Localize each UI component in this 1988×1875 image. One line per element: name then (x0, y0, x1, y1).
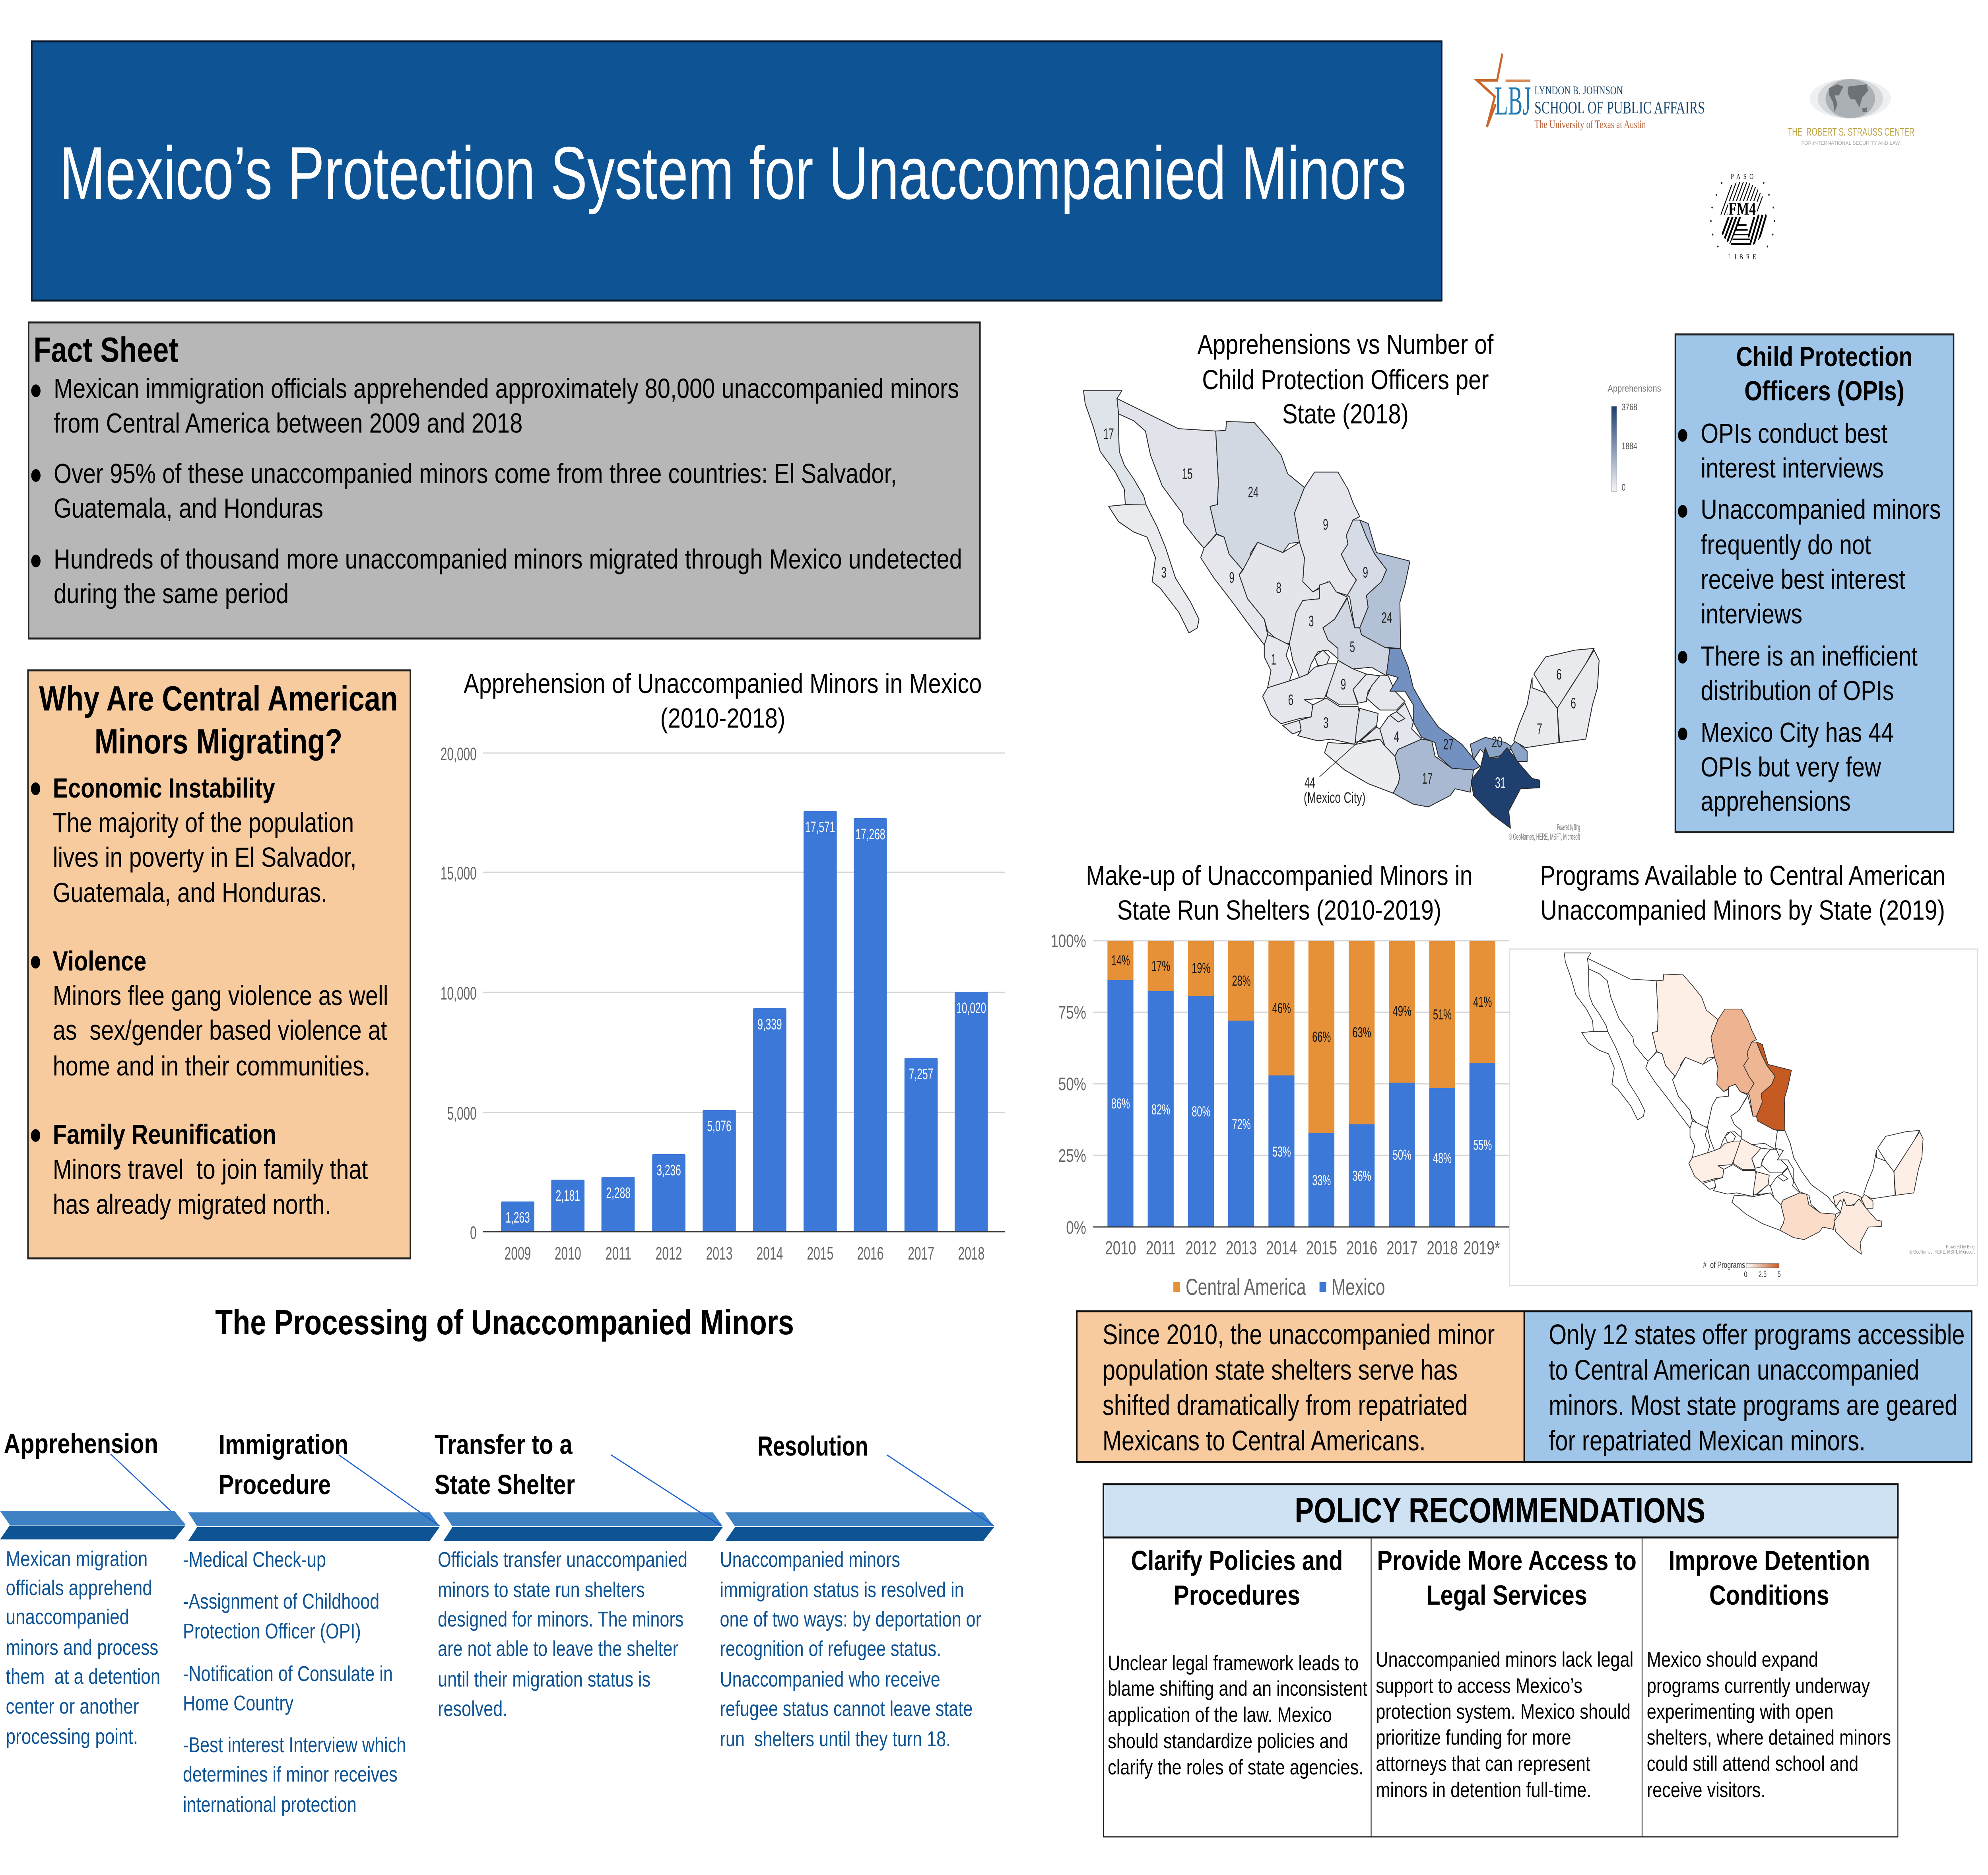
step 3 text: minors to state run shelters (438, 1578, 645, 1602)
x axis labels: 2014 (1266, 1237, 1297, 1258)
map state labels: 6 (1288, 691, 1293, 708)
panel: programs map (1509, 949, 1978, 1285)
why text: has already migrated north. (53, 1189, 331, 1220)
chart title (464, 668, 982, 734)
x axis labels (1105, 1237, 1500, 1258)
bar value labels: 2,288 (606, 1184, 631, 1201)
step 1 text (6, 1547, 160, 1749)
central america segments (1107, 941, 1495, 1133)
why text: Family Reunification (53, 1119, 276, 1150)
central america percentages (1111, 953, 1492, 1045)
heading: why migrating: Why Are Central American (39, 679, 398, 718)
step headings: Resolution (757, 1431, 868, 1462)
mexico percentages: 72% (1232, 1116, 1251, 1132)
map state labels: 6 (1571, 695, 1576, 712)
logo: LBJ School of Public Affairs: LBJ (1495, 78, 1531, 124)
recommendation: detention conditions: receive visitors. (1647, 1778, 1765, 1802)
map attribution (1910, 1244, 1975, 1255)
recommendation: detention conditions: Conditions (1709, 1580, 1829, 1611)
opi text: Unaccompanied minors (1701, 494, 1941, 525)
logo: Robert S. Strauss Center: FOR INTERNATIONAL SECURITY AND LAW (1802, 141, 1900, 146)
recommendation: clarify policies: clarify the roles of state agencies. (1108, 1756, 1363, 1779)
central america percentages: 66% (1312, 1029, 1331, 1045)
recommendation: detention conditions: experimenting with open (1647, 1700, 1834, 1724)
why bullets (31, 782, 40, 1142)
map state labels: 6 (1556, 666, 1562, 683)
opi text: receive best interest (1701, 564, 1905, 595)
recommendation: legal services: protection system. Mexico should (1376, 1700, 1631, 1724)
map legend: apprehensions: 1884 (1622, 441, 1637, 452)
x axis labels: 2009 (505, 1244, 531, 1264)
y axis labels: 10,000 (441, 984, 477, 1004)
y axis labels: 0% (1066, 1218, 1086, 1238)
step 2 text (183, 1548, 406, 1817)
recommendation: legal services: attorneys that can represent (1376, 1752, 1590, 1776)
panel: fact sheet (29, 322, 980, 639)
map state labels: 3 (1323, 714, 1328, 731)
mexico percentages: 55% (1473, 1137, 1492, 1153)
why text: lives in poverty in El Salvador, (53, 842, 357, 873)
process timeline (0, 1428, 994, 1817)
why text (53, 773, 388, 1220)
mexico percentages: 80% (1192, 1104, 1210, 1120)
chart title (1086, 860, 1473, 926)
mexico percentages (1111, 1096, 1492, 1188)
x axis labels: 2013 (706, 1244, 732, 1264)
x axis labels: 2019* (1464, 1237, 1500, 1258)
chart legend (1173, 1274, 1385, 1300)
heading: apprehensions vs number of child protection officers: State (2018) (1282, 398, 1409, 429)
y axis labels: 50% (1058, 1074, 1086, 1094)
heading: apprehensions vs number of child protection officers: Apprehensions vs Number of (1198, 329, 1493, 360)
recommendation: clarify policies: Unclear legal framework leads to (1108, 1652, 1359, 1675)
step 3 text: resolved. (438, 1697, 507, 1721)
opi text: apprehensions (1701, 786, 1851, 817)
logo: Robert S. Strauss Center (1788, 79, 1914, 146)
heading: fact sheet: Fact Sheet (33, 330, 178, 370)
bar value labels: 7,257 (909, 1066, 933, 1082)
map state labels: 3 (1161, 564, 1167, 581)
mexico segments (1107, 980, 1495, 1227)
opi bullets (1678, 429, 1687, 740)
title banner: Mexico’s Protection System for Unaccompanied Minors (60, 131, 1406, 215)
choropleth map: programs per state (1564, 953, 1923, 1254)
y axis labels: 100% (1050, 931, 1086, 951)
why text: Guatemala, and Honduras. (53, 877, 327, 908)
callout: shelter population shift: Mexicans to Central Americans. (1103, 1425, 1426, 1456)
opi text: Mexico City has 44 (1701, 717, 1894, 748)
map state labels: 7 (1537, 720, 1542, 737)
bar value labels: 1,263 (505, 1209, 530, 1226)
fact sheet text: Mexican immigration officials apprehended approximately 80,000 unaccompanied minors (54, 373, 959, 404)
step 2 text: Home Country (183, 1692, 294, 1715)
step 2 text: international protection (183, 1793, 357, 1817)
heading: why migrating: Minors Migrating? (95, 722, 342, 761)
map state labels: 9 (1341, 676, 1346, 693)
central america percentages: 28% (1232, 973, 1251, 989)
map state labels (1103, 425, 1576, 806)
recommendation: clarify policies: should standardize policies and (1108, 1729, 1348, 1753)
step 1 text: center or another (6, 1695, 139, 1718)
mexico percentages: 36% (1353, 1168, 1371, 1184)
x axis labels (505, 1244, 984, 1264)
central america percentages: 14% (1111, 953, 1130, 969)
callout: state programs: Only 12 states offer programs accessible (1549, 1318, 1965, 1350)
map attribution: © GeoNames, HERE, MSFT, Microsoft (1509, 833, 1580, 842)
callout: state programs: to Central American unaccompanied (1549, 1354, 1919, 1386)
step 2 text: -Medical Check-up (183, 1548, 326, 1572)
step 1 text: Mexican migration (6, 1547, 148, 1571)
heading: why migrating (39, 679, 398, 761)
central america percentages: 19% (1192, 960, 1210, 976)
map legend: apprehensions (1607, 383, 1661, 493)
y axis labels (1050, 931, 1086, 1238)
step headings: State Shelter (435, 1469, 575, 1500)
opi text: interviews (1701, 598, 1802, 629)
step 1 text: processing point. (6, 1725, 138, 1749)
step headings: Transfer to a (435, 1429, 573, 1460)
why text: Minors flee gang violence as well (53, 980, 388, 1011)
step 2 text: -Best interest Interview which (183, 1733, 406, 1757)
logo: Paso Libre FM4: LIBRE (1728, 252, 1756, 261)
step 4 text: recognition of refugee status. (720, 1637, 941, 1661)
step 3 text: are not able to leave the shelter (438, 1637, 678, 1661)
callout: state programs: for repatriated Mexican minors. (1549, 1425, 1866, 1456)
logo: Paso Libre FM4 (1710, 172, 1775, 261)
chart legend: Mexico (1332, 1274, 1385, 1300)
panel: child protection officers (1675, 334, 1953, 832)
x axis labels: 2015 (1306, 1237, 1337, 1258)
callout: state programs: minors. Most state programs are geared (1549, 1389, 1957, 1421)
map state labels: 15 (1182, 465, 1193, 482)
heading: programs available by state: Unaccompanied Minors by State (2019) (1540, 895, 1945, 926)
step 3 text: until their migration status is (438, 1668, 650, 1691)
opi heading: Child Protection (1736, 341, 1912, 372)
step 2 text: Protection Officer (OPI) (183, 1620, 361, 1643)
y axis labels: 25% (1058, 1146, 1086, 1166)
map legend: apprehensions: Apprehensions (1607, 383, 1661, 394)
text: Powered by Bing (1557, 823, 1580, 833)
y axis labels: 0 (470, 1223, 477, 1243)
bar value labels: 3,236 (656, 1162, 681, 1178)
step 2 text: -Assignment of Childhood (183, 1590, 379, 1613)
x axis labels: 2018 (1427, 1237, 1458, 1258)
map legend: apprehensions: 0 (1622, 482, 1625, 493)
programs legend: 0 (1744, 1270, 1747, 1279)
why text: Violence (53, 945, 146, 976)
bar value labels (505, 819, 986, 1226)
step 3 text (438, 1548, 687, 1721)
recommendation: legal services (1376, 1545, 1637, 1802)
map state labels: 9 (1323, 516, 1328, 533)
fact sheet text (54, 373, 962, 609)
step 3 text: designed for minors. The minors (438, 1608, 683, 1631)
heading: programs available by state (1540, 860, 1945, 926)
why text: Minors travel to join family that (53, 1154, 368, 1185)
programs legend: 2.5 (1759, 1270, 1767, 1279)
map state labels: 3 (1309, 612, 1314, 629)
recommendation: clarify policies: application of the law. Mexico (1108, 1703, 1332, 1727)
opi text: frequently do not (1701, 529, 1871, 560)
recommendation: detention conditions: programs currently underway (1647, 1674, 1870, 1698)
map state labels: 44 (1305, 774, 1315, 791)
step 1 text: minors and process (6, 1636, 158, 1660)
step headings: Procedure (219, 1469, 331, 1500)
step 4 text: run shelters until they turn 18. (720, 1727, 951, 1751)
map state labels: 31 (1495, 774, 1506, 791)
chart legend: Central America (1186, 1274, 1306, 1300)
callout: shelter population shift: population state shelters serve has (1103, 1354, 1458, 1386)
x axis labels: 2011 (1146, 1237, 1176, 1258)
map state labels: 24 (1248, 483, 1258, 501)
map state labels: 5 (1350, 638, 1355, 655)
chart title: State Run Shelters (2010-2019) (1117, 895, 1441, 926)
chart title: Apprehension of Unaccompanied Minors in Mexico (464, 668, 982, 699)
x axis labels: 2010 (1105, 1237, 1136, 1258)
step 3 text: Officials transfer unaccompanied (438, 1548, 687, 1572)
map state labels: 1 (1271, 651, 1276, 668)
opi heading: Officers (OPIs) (1744, 375, 1905, 406)
x axis labels: 2012 (1186, 1237, 1217, 1258)
map legend: apprehensions: 3768 (1622, 402, 1637, 413)
programs legend (1703, 1261, 1781, 1279)
step 2 text: -Notification of Consulate in (183, 1662, 393, 1686)
why text: as sex/gender based violence at (53, 1015, 387, 1046)
step 2 text: determines if minor receives (183, 1763, 398, 1786)
y axis labels: 5,000 (447, 1104, 477, 1124)
fact sheet text: Hundreds of thousand more unaccompanied minors migrated through Mexico undetected (54, 543, 962, 575)
chart title: (2010-2018) (660, 703, 785, 734)
panel: policy recommendations (1103, 1484, 1898, 1837)
fact sheet text: Guatemala, and Honduras (54, 493, 323, 524)
bar value labels: 17,268 (855, 826, 885, 842)
step 4 text: refugee status cannot leave state (720, 1697, 973, 1721)
logo: LBJ School of Public Affairs (1477, 54, 1705, 131)
fact sheet text: during the same period (54, 578, 289, 609)
callout: state programs (1524, 1311, 1972, 1462)
programs legend: 5 (1778, 1270, 1781, 1279)
logo: LBJ School of Public Affairs: The University of Texas at Austin (1534, 118, 1646, 131)
logo: LBJ School of Public Affairs: SCHOOL OF PUBLIC AFFAIRS (1534, 98, 1705, 117)
leader lines (111, 1454, 994, 1526)
stacked bar chart: make-up of unaccompanied minors in shelters (1050, 860, 1509, 1300)
recommendation: detention conditions: could still attend school and (1647, 1752, 1858, 1776)
x axis labels: 2013 (1226, 1237, 1257, 1258)
fact sheet bullets (31, 384, 41, 567)
x axis labels: 2010 (555, 1244, 581, 1264)
callout: shelter population shift: shifted dramatically from repatriated (1103, 1389, 1468, 1421)
x axis labels: 2016 (1346, 1237, 1377, 1258)
central america percentages: 49% (1393, 1003, 1411, 1019)
x axis labels: 2018 (958, 1244, 984, 1264)
recommendation: clarify policies: blame shifting and an inconsistent (1108, 1677, 1368, 1700)
x axis labels: 2017 (908, 1244, 934, 1264)
recommendation: legal services: support to access Mexico’s (1376, 1674, 1582, 1698)
map state labels: 27 (1443, 736, 1454, 753)
recommendation: legal services: Legal Services (1426, 1580, 1587, 1611)
map attribution: © GeoNames, HERE, MSFT, Microsoft (1910, 1250, 1975, 1255)
callout: shelter population shift (1077, 1311, 1524, 1462)
central america percentages: 51% (1433, 1007, 1452, 1023)
x axis labels: 2016 (857, 1244, 883, 1264)
bar value labels: 9,339 (757, 1016, 782, 1033)
choropleth map: child protection officers per state (1083, 391, 1599, 828)
map state labels: 17 (1103, 425, 1114, 442)
callout: shelter population shift: Since 2010, the unaccompanied minor (1103, 1318, 1495, 1350)
step headings: Apprehension (4, 1428, 158, 1459)
y axis labels (441, 744, 477, 1243)
opi text: interest interviews (1701, 452, 1884, 483)
mexico percentages: 33% (1312, 1172, 1331, 1188)
bar value labels: 2,181 (556, 1187, 580, 1204)
recommendation: legal services: prioritize funding for more (1376, 1726, 1571, 1749)
recommendation: detention conditions: Improve Detention (1668, 1545, 1870, 1576)
logo: Robert S. Strauss Center: THE ROBERT S. STRAUSS CENTER (1788, 126, 1914, 138)
mexico percentages: 53% (1272, 1144, 1291, 1160)
recommendation: clarify policies (1108, 1545, 1368, 1779)
map state labels: (Mexico City) (1304, 789, 1365, 806)
logo: LBJ School of Public Affairs: LYNDON B. JOHNSON (1534, 84, 1623, 97)
opi text (1701, 418, 1941, 817)
step headings: Immigration (219, 1429, 348, 1460)
recommendation: detention conditions: Mexico should expand (1647, 1648, 1818, 1671)
recommendation: clarify policies: Clarify Policies and (1131, 1545, 1343, 1576)
step 1 text: unaccompanied (6, 1605, 129, 1629)
bar value labels: 5,076 (707, 1118, 732, 1134)
y axis labels: 15,000 (441, 864, 477, 884)
map state labels: 20 (1492, 733, 1502, 750)
mexico percentages: 48% (1433, 1150, 1452, 1166)
map state labels: 17 (1422, 770, 1433, 787)
opi text: OPIs conduct best (1701, 418, 1887, 449)
recommendation: legal services: Provide More Access to (1377, 1545, 1637, 1576)
chevron arrows (0, 1511, 994, 1541)
chart title: Make-up of Unaccompanied Minors in (1086, 860, 1473, 891)
opi text: There is an inefficient (1701, 641, 1918, 672)
opi heading (1736, 341, 1912, 406)
policy header (1103, 1484, 1898, 1537)
y axis labels: 75% (1058, 1003, 1086, 1023)
opi text: distribution of OPIs (1701, 675, 1894, 706)
x axis labels: 2014 (756, 1244, 783, 1264)
heading: programs available by state: Programs Available to Central American (1540, 860, 1945, 891)
step 4 text: Unaccompanied who receive (720, 1668, 940, 1691)
step 4 text: one of two ways: by deportation or (720, 1608, 981, 1631)
step 1 text: officials apprehend (6, 1576, 152, 1600)
map state labels: 24 (1382, 609, 1392, 626)
x axis labels: 2012 (656, 1244, 682, 1264)
logo: Paso Libre FM4: PASO (1731, 172, 1753, 181)
fact sheet text: Over 95% of these unaccompanied minors come from three countries: El Salvador, (54, 458, 897, 489)
recommendation: clarify policies: Procedures (1174, 1580, 1300, 1611)
bars (501, 811, 988, 1232)
step 4 text: Unaccompanied minors (720, 1548, 900, 1572)
x axis labels: 2015 (807, 1244, 833, 1264)
heading: apprehensions vs number of child protection officers: Child Protection Officers per (1202, 364, 1489, 395)
why text: The majority of the population (53, 807, 354, 838)
step 1 text: them at a detention (6, 1665, 160, 1689)
heading: apprehensions vs number of child protection officers (1198, 329, 1493, 429)
map state labels: 8 (1276, 579, 1281, 596)
step 4 text: immigration status is resolved in (720, 1578, 964, 1602)
step headings (4, 1428, 868, 1500)
recommendation: detention conditions (1647, 1545, 1891, 1802)
opi text: OPIs but very few (1701, 751, 1881, 782)
panel: why are central american minors migrating (28, 670, 410, 1258)
heading: the processing of unaccompanied minors: The Processing of Unaccompanied Minors (215, 1303, 794, 1342)
programs legend: # of Programs (1703, 1261, 1745, 1270)
central america percentages: 17% (1151, 958, 1170, 974)
y axis labels: 20,000 (441, 744, 477, 765)
fact sheet text: from Central America between 2009 and 2018 (54, 408, 522, 439)
title banner (32, 41, 1442, 301)
bar chart: apprehensions of unaccompanied minors (441, 668, 1005, 1264)
map attribution (1509, 823, 1580, 842)
central america percentages: 63% (1353, 1025, 1371, 1040)
bar value labels: 10,020 (956, 1000, 986, 1016)
map attribution: Powered by Bing (1946, 1244, 1974, 1250)
why text: home and in their communities. (53, 1050, 371, 1081)
central america percentages: 41% (1473, 994, 1492, 1010)
mexico percentages: 50% (1393, 1147, 1411, 1163)
bar value labels: 17,571 (805, 819, 835, 835)
map state labels: 9 (1363, 564, 1368, 581)
central america percentages: 46% (1272, 1000, 1291, 1016)
recommendation: detention conditions: shelters, where detained minors (1647, 1726, 1891, 1749)
x axis labels: 2011 (606, 1244, 631, 1264)
mexico percentages: 86% (1111, 1096, 1130, 1112)
recommendation: legal services: Unaccompanied minors lack legal (1376, 1648, 1633, 1671)
x axis labels: 2017 (1386, 1237, 1417, 1258)
why text: Economic Instability (53, 773, 275, 804)
mexico percentages: 82% (1151, 1102, 1170, 1118)
map state labels: 4 (1394, 728, 1399, 745)
recommendation: legal services: minors in detention full-time. (1376, 1778, 1591, 1802)
step 4 text (720, 1548, 981, 1751)
map state labels: 9 (1229, 569, 1235, 586)
logo: Paso Libre FM4: FM4 (1728, 198, 1756, 219)
policy header: POLICY RECOMMENDATIONS (1295, 1491, 1705, 1530)
